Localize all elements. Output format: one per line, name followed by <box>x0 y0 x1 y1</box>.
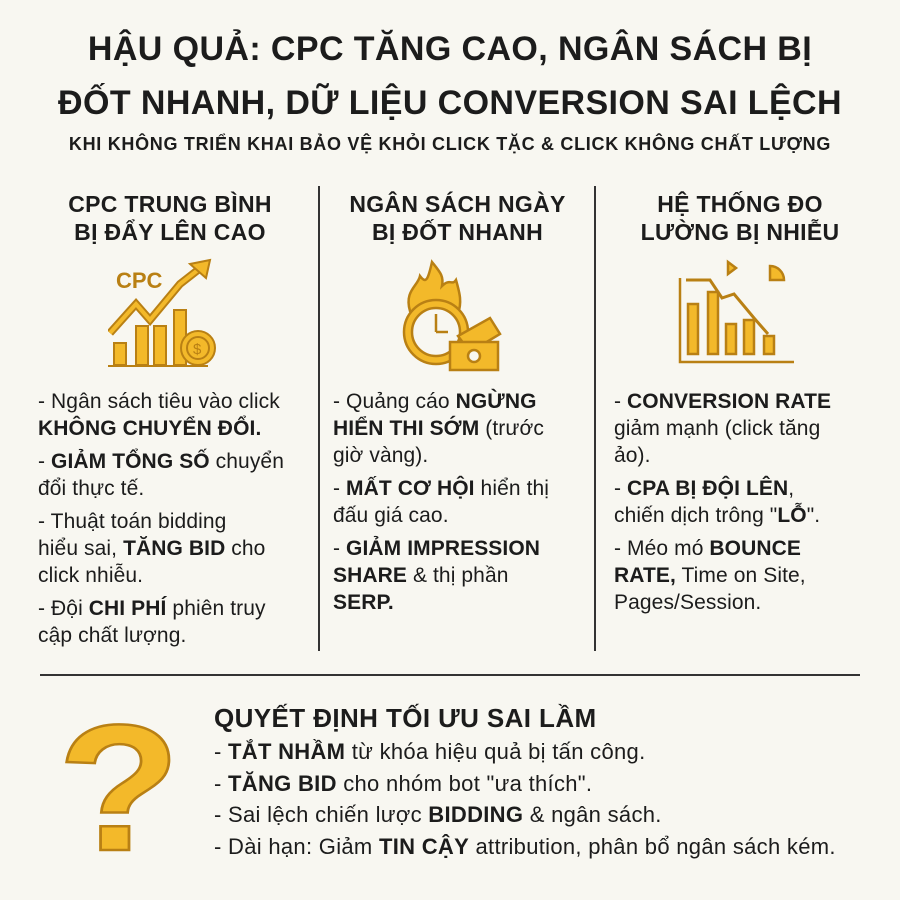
text: cpc bullets: đổi thực tế. <box>38 477 144 500</box>
heading: budget <box>349 191 566 245</box>
heading: measurement <box>641 191 839 245</box>
icon: broken chart <box>678 260 794 364</box>
text: measurement bullets: giảm mạnh (click tăng <box>614 417 820 440</box>
icon: cpc chart: $ <box>193 341 202 358</box>
text: budget bullets: SERP. <box>333 591 394 614</box>
text: decision bullets: - TẮT NHẦM từ khóa hiệu quả bị tấn công. <box>214 739 645 764</box>
icon: burning clock <box>402 259 502 372</box>
text: budget bullets: SHARE & thị phần <box>333 564 509 587</box>
heading: cpc: CPC TRUNG BÌNH <box>68 191 272 217</box>
subtitle: KHI KHÔNG TRIỂN KHAI BẢO VỆ KHỎI CLICK TẶC & CLICK KHÔNG CHẤT LƯỢNG <box>69 134 831 154</box>
text: measurement bullets <box>614 390 831 614</box>
text: cpc bullets: - Đội CHI PHÍ phiên truy <box>38 597 266 620</box>
text: cpc bullets: click nhiễu. <box>38 564 143 587</box>
panel: budget <box>333 191 566 614</box>
panel: wrong decisions <box>214 703 836 858</box>
icon: cpc chart: CPC <box>116 268 163 293</box>
title <box>58 29 842 122</box>
text: measurement bullets: - CPA BỊ ĐỘI LÊN, <box>614 477 794 500</box>
text: measurement bullets: - CONVERSION RATE <box>614 390 831 413</box>
panel: measurement <box>614 191 839 614</box>
text: cpc bullets: - Thuật toán bidding <box>38 510 226 533</box>
text: budget bullets <box>333 388 549 614</box>
heading: cpc <box>68 191 272 245</box>
text: measurement bullets: RATE, Time on Site, <box>614 564 806 587</box>
heading: measurement: LƯỜNG BỊ NHIỄU <box>641 219 839 245</box>
text: measurement bullets: ảo). <box>614 444 651 467</box>
text: decision bullets: - TĂNG BID cho nhóm bot "ưa thích". <box>214 770 592 796</box>
text: measurement bullets: chiến dịch trông "LỖ". <box>614 504 820 527</box>
icon: cpc chart <box>108 258 216 367</box>
heading: wrong decisions: QUYẾT ĐỊNH TỐI ƯU SAI LẦM <box>214 703 597 733</box>
text: cpc bullets: - Ngân sách tiêu vào click <box>38 390 280 413</box>
text: cpc bullets: cập chất lượng. <box>38 624 186 647</box>
text: decision bullets: - Sai lệch chiến lược BIDDING & ngân sách. <box>214 802 662 827</box>
panel: cpc <box>38 191 284 647</box>
text: budget bullets: - GIẢM IMPRESSION <box>333 537 540 560</box>
text: measurement bullets: Pages/Session. <box>614 591 761 614</box>
heading: budget: NGÂN SÁCH NGÀY <box>349 191 566 217</box>
heading: measurement: HỆ THỐNG ĐO <box>657 191 823 217</box>
text: cpc bullets: KHÔNG CHUYỂN ĐỔI. <box>38 417 261 440</box>
text: decision bullets: - Dài hạn: Giảm TIN CẬY attribution, phân bổ ngân sách kém. <box>214 834 836 858</box>
heading: budget: BỊ ĐỐT NHANH <box>372 219 543 245</box>
title: ĐỐT NHANH, DỮ LIỆU CONVERSION SAI LỆCH <box>58 84 842 122</box>
heading: cpc: BỊ ĐẨY LÊN CAO <box>74 219 266 245</box>
text: cpc bullets: hiểu sai, TĂNG BID cho <box>38 537 265 560</box>
text: budget bullets: HIỂN THI SỚM (trước <box>333 417 544 440</box>
text: budget bullets: giờ vàng). <box>333 444 428 467</box>
text: budget bullets: - MẤT CƠ HỘI hiển thị <box>333 477 549 500</box>
text: budget bullets: - Quảng cáo NGỪNG <box>333 390 537 413</box>
text: budget bullets: đấu giá cao. <box>333 504 449 527</box>
title: HẬU QUẢ: CPC TĂNG CAO, NGÂN SÁCH BỊ <box>88 30 812 68</box>
text: measurement bullets: - Méo mó BOUNCE <box>614 537 801 560</box>
text: cpc bullets: - GIẢM TỔNG SỐ chuyển <box>38 450 284 473</box>
text: decision bullets <box>214 739 836 858</box>
text: cpc bullets <box>38 390 284 647</box>
